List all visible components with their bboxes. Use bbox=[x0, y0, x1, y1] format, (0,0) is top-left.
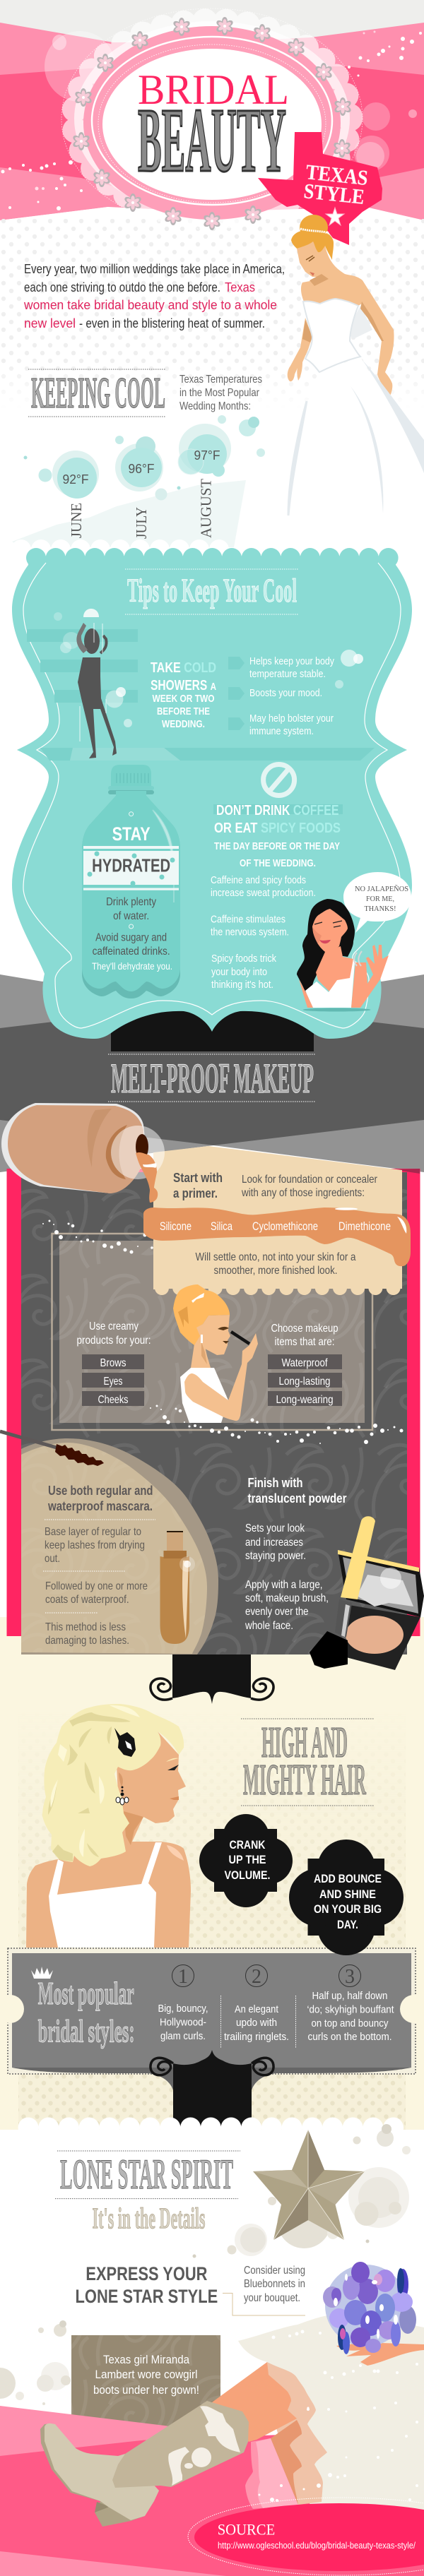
style 3: curls on the bottom. bbox=[308, 2031, 391, 2043]
patterned panel bbox=[21, 1172, 407, 1654]
powder text: evenly over the bbox=[245, 1606, 309, 1618]
powder text: and increases bbox=[245, 1537, 303, 1549]
take cold showers text: BEFORE THE bbox=[157, 705, 210, 717]
white scallop edge bbox=[21, 539, 233, 559]
hair flower bbox=[114, 1728, 136, 1757]
panel: lone star spirit bbox=[0, 2124, 424, 2576]
mascara tips text: damaging to lashes. bbox=[45, 1635, 129, 1647]
section backdrop grey bbox=[0, 946, 424, 1172]
powder text: Apply with a large, bbox=[245, 1579, 322, 1591]
panel: tips to keep cool bbox=[12, 549, 412, 1039]
bride skirt bbox=[269, 357, 424, 565]
mascara brush bbox=[0, 1431, 104, 1466]
style 3: 3 bbox=[345, 1966, 355, 1988]
mascara tips text: This method is less bbox=[45, 1621, 126, 1633]
creamy products list: Eyes bbox=[103, 1376, 123, 1388]
bottle instructions bbox=[92, 896, 172, 972]
speech bubble: NO JALAPEÑOS bbox=[355, 885, 408, 893]
panel: hair section bbox=[7, 1704, 416, 2130]
june temperature bubble bbox=[52, 451, 99, 499]
mascara heading bbox=[47, 1484, 153, 1513]
winking woman bbox=[297, 899, 389, 1011]
blonde woman bbox=[26, 1704, 191, 1948]
icon: shower head bbox=[83, 609, 99, 617]
ear bbox=[119, 1772, 123, 1787]
sparkles bbox=[42, 1220, 403, 1444]
woman wave lines bbox=[354, 951, 362, 966]
woman hair accent bbox=[192, 1293, 204, 1303]
no coffee reasons text: Caffeine and spicy foods bbox=[211, 874, 306, 886]
sparkles bbox=[1, 31, 422, 210]
makeup items list: Long-wearing bbox=[276, 1394, 334, 1406]
express heading: LONE STAR STYLE bbox=[76, 2286, 218, 2307]
miranda text box: Lambert wore cowgirl bbox=[95, 2368, 198, 2381]
woman face bbox=[312, 909, 348, 952]
miranda text box bbox=[71, 2335, 220, 2427]
speech bubble: THANKS! bbox=[365, 905, 396, 913]
woman hair bbox=[297, 899, 355, 1001]
bluebonnets text: Bluebonnets in bbox=[244, 2278, 305, 2290]
style 2: An elegant bbox=[235, 2003, 279, 2015]
source badge bbox=[188, 2498, 424, 2575]
july label: JULY bbox=[133, 507, 150, 539]
bouquet of bluebonnets bbox=[323, 2262, 416, 2354]
woman left arm bbox=[299, 979, 313, 1008]
callout: add bounce and shine: ADD BOUNCE bbox=[314, 1872, 382, 1885]
primer text: a primer. bbox=[173, 1186, 218, 1200]
panel shape bbox=[12, 558, 412, 1039]
woman eye and lips bbox=[218, 1327, 229, 1344]
no coffee heading: OF THE WEDDING. bbox=[240, 857, 316, 869]
bluebonnets text: your bouquet. bbox=[244, 2292, 300, 2304]
ingredient band bbox=[143, 1208, 411, 1266]
pink ribbon background bbox=[0, 23, 424, 240]
leg ruffle sparkles bbox=[259, 2407, 321, 2502]
no coffee reasons text: Caffeine stimulates bbox=[211, 914, 285, 925]
june temperature bubble: 92°F bbox=[62, 472, 89, 487]
panel inner line bbox=[23, 563, 401, 1028]
bride dress folds bbox=[288, 360, 424, 515]
primer text: smoother, more finished look. bbox=[213, 1265, 338, 1277]
callout: add bounce and shine: DAY. bbox=[337, 1918, 358, 1931]
pink ring frame bbox=[83, 26, 341, 220]
beige bubbles bbox=[0, 2124, 411, 2405]
panel scallops bbox=[36, 548, 390, 568]
powder text bbox=[245, 1476, 346, 1632]
bottle instructions: They'll dehydrate you. bbox=[92, 960, 172, 972]
style 1: Big, bouncy, bbox=[158, 2003, 208, 2015]
boot foot bbox=[45, 2423, 159, 2520]
hair shading bbox=[48, 1712, 131, 1861]
popular styles banner bbox=[0, 1948, 424, 2090]
makeup items list: Waterproof bbox=[281, 1357, 328, 1369]
badge text: style: STYLE bbox=[302, 179, 365, 209]
cowgirl boot bbox=[40, 2401, 249, 2527]
banner notches bbox=[0, 1995, 424, 2023]
creamy products list: Cheeks bbox=[98, 1394, 129, 1406]
creamy products list: Use creamy bbox=[89, 1320, 139, 1332]
bottle text: hydrated: HYDRATED bbox=[92, 855, 170, 876]
flowers on frame bbox=[72, 17, 352, 230]
makeup items list: items that are: bbox=[274, 1336, 335, 1348]
bride veil bbox=[346, 306, 372, 339]
july temperature bubble bbox=[115, 436, 163, 491]
temperatures intro text: Texas Temperatures bbox=[179, 374, 262, 386]
bottle instructions: caffeinated drinks. bbox=[93, 946, 170, 958]
callout: crank up the volume bbox=[199, 1814, 293, 1907]
no coffee heading: OR EAT SPICY FOODS bbox=[214, 821, 341, 836]
style 2: updo with bbox=[236, 2017, 277, 2029]
speech bubble bbox=[343, 872, 411, 933]
popular styles heading: Most popular bbox=[38, 1975, 134, 2011]
icon: crown bbox=[31, 1967, 53, 1979]
bluebonnets text bbox=[244, 2265, 305, 2304]
speech bubble: FOR ME, bbox=[366, 895, 394, 903]
august temperature bubble bbox=[178, 424, 231, 477]
primer text: Will settle onto, not into your skin for a bbox=[195, 1251, 356, 1263]
woman dress bbox=[305, 959, 355, 1008]
take cold showers text: SHOWERS A bbox=[151, 678, 216, 693]
hair highlights bbox=[50, 1705, 140, 1857]
compact powder bbox=[346, 1616, 404, 1654]
miranda text box: boots under her gown! bbox=[93, 2383, 199, 2397]
powder text: Finish with bbox=[247, 1476, 302, 1490]
style 2: 2 bbox=[252, 1966, 261, 1988]
callout: crank up the volume: VOLUME. bbox=[225, 1868, 270, 1882]
no coffee heading: THE DAY BEFORE OR THE DAY bbox=[214, 840, 340, 852]
earring bbox=[116, 1787, 129, 1805]
callout: add bounce and shine: ON YOUR BIG bbox=[314, 1902, 382, 1916]
makeup items list: Choose makeup bbox=[271, 1323, 338, 1335]
creamy products list: Brows bbox=[100, 1357, 126, 1369]
temperatures intro text: in the Most Popular bbox=[179, 387, 260, 399]
woman skin bbox=[26, 1731, 191, 1948]
header section bbox=[0, 0, 424, 565]
ingredient labels: Silicone bbox=[160, 1220, 192, 1233]
popular styles heading: bridal styles: bbox=[38, 2012, 135, 2049]
pink side walls bbox=[7, 1169, 420, 1636]
compact base bbox=[346, 1605, 420, 1670]
intro text: each one striving to outdo the one before. bbox=[24, 280, 220, 294]
creamy products list bbox=[76, 1320, 151, 1406]
intro text: Every year, two million weddings take place in America, bbox=[24, 262, 285, 276]
style 2: trailing ringlets. bbox=[224, 2031, 289, 2043]
ingredient labels: Dimethicone bbox=[338, 1220, 391, 1233]
no coffee reasons text: Spicy foods trick bbox=[211, 953, 276, 965]
bottle instructions: Drink plenty bbox=[106, 896, 156, 908]
no coffee heading bbox=[213, 803, 343, 869]
no coffee reasons text: the nervous system. bbox=[211, 926, 289, 938]
bride bodice bbox=[303, 299, 360, 372]
texas state badge bbox=[258, 132, 382, 245]
pink footer ribbon bbox=[0, 2406, 424, 2576]
no coffee reasons text: thinking it's hot. bbox=[211, 979, 273, 991]
ingredient labels bbox=[160, 1220, 391, 1233]
pale ruffle bbox=[267, 2362, 327, 2505]
melt-proof black connector bbox=[111, 1003, 314, 1051]
connector line bbox=[223, 2294, 305, 2315]
powder text: Sets your look bbox=[245, 1522, 305, 1534]
panel: makeup tips bbox=[0, 1103, 424, 2130]
primer text: Start with bbox=[173, 1171, 223, 1185]
intro text: women take bridal beauty and style to a whole bbox=[23, 298, 277, 312]
title: bridal: BRIDAL bbox=[138, 66, 289, 113]
icon: prohibited sign bbox=[264, 764, 295, 795]
earring bbox=[201, 1335, 203, 1343]
express heading bbox=[76, 2263, 218, 2307]
bride hair bbox=[291, 229, 334, 260]
leg bbox=[212, 2362, 297, 2442]
bluebonnets text: Consider using bbox=[244, 2265, 305, 2277]
shower benefits text: Helps keep your body bbox=[249, 655, 334, 667]
gown sparkles bbox=[271, 2330, 418, 2501]
shower benefits text: May help bolster your bbox=[249, 712, 334, 724]
august label: AUGUST bbox=[198, 479, 215, 538]
no coffee reasons text: increase sweat production. bbox=[211, 887, 316, 899]
callout: add bounce and shine: AND SHINE bbox=[319, 1888, 376, 1901]
no coffee reasons text bbox=[211, 874, 316, 991]
shoulder highlight bbox=[167, 1845, 184, 1861]
shower figure bbox=[76, 623, 117, 758]
style 1: Hollywood- bbox=[160, 2016, 206, 2028]
shower benefits text: temperature stable. bbox=[249, 668, 326, 680]
eye and lips bbox=[167, 1765, 179, 1770]
temperatures intro text: Wedding Months: bbox=[179, 400, 251, 412]
bride skin bbox=[297, 242, 394, 399]
cream page background bbox=[0, 1617, 424, 2130]
creamy products list: products for your: bbox=[76, 1335, 151, 1347]
woman applying mascara bbox=[173, 1284, 258, 1423]
style 1: 1 bbox=[178, 1966, 188, 1988]
mascara heading: waterproof mascara. bbox=[47, 1499, 153, 1513]
callout: crank up the volume: CRANK bbox=[229, 1838, 266, 1852]
bride shadows bbox=[310, 274, 384, 341]
woman neck and chest bbox=[316, 946, 353, 992]
mascara tips text: Followed by one or more bbox=[45, 1580, 148, 1592]
woman face bbox=[196, 1315, 230, 1355]
shower benefit tags bbox=[228, 657, 245, 730]
mascara tips text: coats of waterproof. bbox=[45, 1594, 129, 1606]
black stand ornament bbox=[151, 2050, 273, 2127]
bride face details bbox=[306, 256, 314, 261]
badge star bbox=[326, 208, 344, 225]
small bubbles bbox=[24, 415, 265, 500]
bottle instructions: Avoid sugary and bbox=[95, 932, 167, 943]
temperatures intro text bbox=[179, 374, 262, 412]
powder text: soft, makeup brush, bbox=[245, 1592, 329, 1604]
mascara wand bbox=[231, 1332, 249, 1344]
powder text: whole face. bbox=[245, 1620, 293, 1632]
dotted cream background bbox=[18, 1779, 406, 2130]
gown bbox=[238, 2315, 424, 2514]
woman hair shading bbox=[178, 1306, 189, 1328]
mascara tips text: Base layer of regular to bbox=[45, 1526, 141, 1538]
primer text: Look for foundation or concealer bbox=[242, 1174, 378, 1186]
style 3: on top and bouncy bbox=[311, 2017, 389, 2029]
intro text: Texas bbox=[225, 280, 255, 294]
white dress bbox=[49, 1842, 162, 1948]
callout: add bounce and shine bbox=[289, 1839, 404, 1955]
hair heading bbox=[241, 1719, 375, 1806]
woman hair bbox=[173, 1284, 230, 1345]
mascara panel bbox=[0, 1431, 218, 1654]
july temperature bubble: 96°F bbox=[129, 462, 155, 476]
mascara tube bbox=[160, 1531, 195, 1644]
callout: crank up the volume: UP THE bbox=[229, 1853, 266, 1866]
bride headpiece bbox=[300, 229, 329, 233]
veil shape bbox=[12, 480, 246, 547]
water bottle bbox=[82, 765, 180, 998]
intro dotted background bbox=[1, 219, 424, 384]
bouquet hand bbox=[336, 2342, 424, 2366]
compact mirror lid bbox=[338, 1550, 424, 1617]
fillet under banner bbox=[148, 2069, 276, 2090]
subheading: details: It's in the Details bbox=[92, 2203, 205, 2236]
brush ferrule bbox=[335, 1599, 352, 1637]
bottle instructions: of water. bbox=[113, 910, 149, 922]
keeping cool section bbox=[12, 369, 265, 547]
pink petticoat bbox=[245, 2438, 298, 2509]
powder text: staying power. bbox=[245, 1550, 306, 1562]
black ornament under makeup panel bbox=[151, 1654, 273, 1704]
no coffee heading: DON’T DRINK COFFEE bbox=[216, 803, 339, 818]
shower stripes bbox=[27, 629, 375, 761]
makeup items list: Long-lasting bbox=[278, 1376, 331, 1388]
neck shadow bbox=[124, 1811, 143, 1845]
mirror frame bbox=[52, 1234, 372, 1430]
woman dress bbox=[180, 1368, 228, 1423]
miranda text box: Texas girl Miranda bbox=[103, 2353, 189, 2366]
style 2 bbox=[224, 1964, 289, 2043]
bride illustration bbox=[269, 215, 424, 565]
primer text bbox=[173, 1171, 378, 1277]
style 3: Half up, half down bbox=[312, 1990, 387, 2002]
mascara tips text: out. bbox=[45, 1553, 60, 1565]
august temperature bubble: 97°F bbox=[194, 448, 220, 463]
white scallop divider bbox=[0, 2128, 424, 2576]
icon: shower bubbles bbox=[54, 612, 363, 727]
brush handle bbox=[341, 1516, 375, 1599]
primer text: with any of those ingredients: bbox=[241, 1187, 365, 1199]
brush bristles bbox=[310, 1631, 348, 1669]
popular styles heading bbox=[38, 1975, 135, 2049]
style 3 bbox=[307, 1964, 394, 2043]
badge text: texas: TEXAS bbox=[305, 160, 369, 190]
lace frame bbox=[61, 8, 363, 229]
compact and brush bbox=[310, 1516, 424, 1670]
bride bun bbox=[300, 215, 328, 240]
translucent bubbles bbox=[45, 31, 417, 171]
mascara tips text bbox=[43, 1520, 155, 1647]
primer cream panel bbox=[153, 1146, 402, 1289]
style 3: ‘do; skyhigh bouffant bbox=[307, 2004, 394, 2015]
shower benefits text bbox=[249, 655, 334, 737]
style 1 bbox=[158, 1964, 208, 2042]
no coffee reasons text: your body into bbox=[211, 966, 267, 978]
shower benefits text: immune system. bbox=[249, 725, 314, 737]
blonde hair bbox=[42, 1704, 184, 1866]
boot heel and sole bbox=[40, 2423, 145, 2527]
boot floral decoration bbox=[168, 2406, 240, 2486]
take cold showers text: WEEK OR TWO bbox=[153, 693, 215, 705]
june label: JUNE bbox=[68, 503, 85, 538]
take cold showers text: TAKE COLD bbox=[151, 660, 216, 676]
keeping cool section: KEEPING COOL bbox=[31, 369, 165, 417]
take cold showers text bbox=[151, 660, 216, 730]
bride left arm bbox=[288, 318, 312, 381]
ingredient labels: Cyclomethicone bbox=[252, 1220, 318, 1233]
woman right arm and hand bbox=[351, 945, 389, 1008]
woman neck bbox=[191, 1331, 211, 1368]
mascara heading: Use both regular and bbox=[48, 1484, 153, 1498]
intro text bbox=[23, 262, 285, 330]
woman face details bbox=[314, 921, 342, 927]
intro text: new level bbox=[24, 316, 76, 330]
ornament spirals bbox=[151, 1678, 273, 1700]
darker ruffle bbox=[271, 2420, 302, 2505]
style 1: glam curls. bbox=[160, 2030, 206, 2042]
makeup items list bbox=[268, 1323, 342, 1406]
intro text: - even in the blistering heat of summer. bbox=[79, 316, 265, 330]
boot shaft bbox=[112, 2401, 249, 2488]
powder text: translucent powder bbox=[247, 1491, 346, 1505]
icon: star bbox=[253, 2130, 365, 2240]
ingredient labels: Silica bbox=[211, 1220, 232, 1233]
woman arm and hand bbox=[184, 1333, 258, 1421]
shower benefits text: Boosts your mood. bbox=[249, 687, 322, 699]
foundation bottle bbox=[1, 1103, 165, 1193]
express heading: EXPRESS YOUR bbox=[86, 2263, 207, 2284]
foundation drip bbox=[136, 1152, 158, 1203]
bride leg and garter bbox=[212, 2362, 327, 2509]
take cold showers text: WEDDING. bbox=[162, 718, 205, 730]
bottle text: stay: STAY bbox=[112, 823, 151, 845]
mascara tips text: keep lashes from drying bbox=[45, 1539, 145, 1551]
source label: SOURCE bbox=[218, 2520, 275, 2538]
